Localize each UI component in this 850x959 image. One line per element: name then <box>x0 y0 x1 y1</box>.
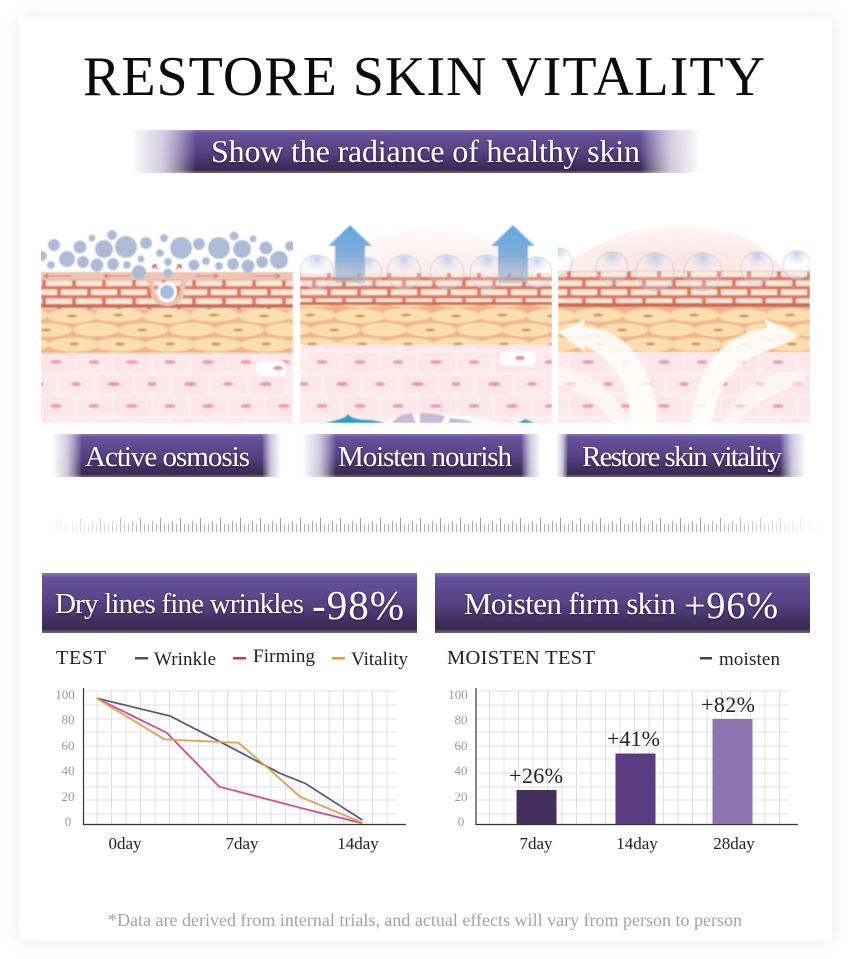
label: Restore skin vitality <box>556 434 806 477</box>
y axis labels: 60 <box>454 738 468 753</box>
x axis labels: 14day <box>616 834 658 853</box>
skin dimple with absorbed droplet <box>144 280 192 307</box>
absorption bubbles <box>37 230 295 279</box>
legend: moisten test: moisten <box>719 649 780 670</box>
blue vessel and purple cells <box>325 413 535 423</box>
label: Moisten nourish: Moisten nourish <box>338 441 512 473</box>
wrinkle line <box>97 698 362 820</box>
legend: moisten test <box>447 647 780 670</box>
y axis labels: 20 <box>62 789 74 804</box>
y axis labels: 100 <box>448 687 468 702</box>
x axis labels: 28day <box>713 834 755 853</box>
panel: moisten nourish skin illustration <box>300 225 552 423</box>
water droplets <box>300 255 552 289</box>
x axis labels: 7day <box>519 834 553 853</box>
bar chart <box>448 687 798 853</box>
legend: test: Wrinkle <box>154 649 216 670</box>
header: dry lines fine wrinkles <box>42 573 417 633</box>
legend: test: TEST <box>56 647 106 669</box>
panel: restore skin vitality illustration <box>544 225 811 423</box>
x axis labels: 7day <box>225 834 259 853</box>
bar value labels <box>509 692 755 788</box>
firming line <box>97 698 362 823</box>
line chart <box>55 687 406 853</box>
spreading arrows <box>44 265 280 278</box>
bar: 28day <box>712 719 752 824</box>
x axis labels: 14day <box>337 834 379 853</box>
water droplets <box>544 248 811 291</box>
subtitle banner <box>130 130 701 173</box>
x axis labels: 0day <box>108 834 142 853</box>
upward arrow right <box>491 225 535 283</box>
header: dry lines fine wrinkles: Dry lines fine wrinkles <box>55 588 304 620</box>
header: moisten firm skin: Moisten firm skin <box>464 586 676 621</box>
upward arrow left <box>328 225 372 283</box>
label: Restore skin vitality: Restore skin vitality <box>582 441 782 473</box>
panel: active osmosis skin illustration <box>37 225 295 423</box>
bar value labels: +26% <box>509 763 563 788</box>
bar: 7day <box>516 790 556 824</box>
y axis labels: 80 <box>62 712 74 727</box>
bar: 14day <box>616 754 656 824</box>
label: Active osmosis: Active osmosis <box>85 441 250 473</box>
footnote: *Data are derived from internal trials, and actual effects will vary from person to person <box>108 910 742 930</box>
y axis labels <box>448 687 468 829</box>
legend: test <box>56 646 408 670</box>
y axis labels: 60 <box>62 738 74 753</box>
subtitle text: Show the radiance of healthy skin <box>211 133 640 169</box>
y axis labels <box>55 687 75 829</box>
legend: moisten test: MOISTEN TEST <box>447 647 595 669</box>
y axis labels: 0 <box>65 814 71 829</box>
y axis labels: 100 <box>55 687 75 702</box>
header: moisten firm skin: +96% <box>684 585 778 627</box>
legend: test: Vitality <box>351 649 408 670</box>
x axis labels <box>519 834 755 853</box>
y axis labels: 0 <box>458 814 464 829</box>
bar value labels: +41% <box>607 726 660 751</box>
header: moisten firm skin <box>435 573 810 633</box>
label: Moisten nourish <box>302 434 541 477</box>
header: dry lines fine wrinkles: -98% <box>312 582 404 628</box>
legend: test: Firming <box>253 646 316 667</box>
y axis labels: 80 <box>454 712 468 727</box>
vitality line <box>97 698 362 823</box>
white repair arrows <box>558 318 805 423</box>
x axis labels <box>108 834 379 853</box>
y axis labels: 20 <box>454 789 468 804</box>
bar value labels: +82% <box>701 692 755 717</box>
y axis labels: 40 <box>454 763 468 778</box>
title: RESTORE SKIN VITALITY <box>83 46 765 108</box>
y axis labels: 40 <box>62 763 74 778</box>
label: Active osmosis <box>52 434 281 477</box>
